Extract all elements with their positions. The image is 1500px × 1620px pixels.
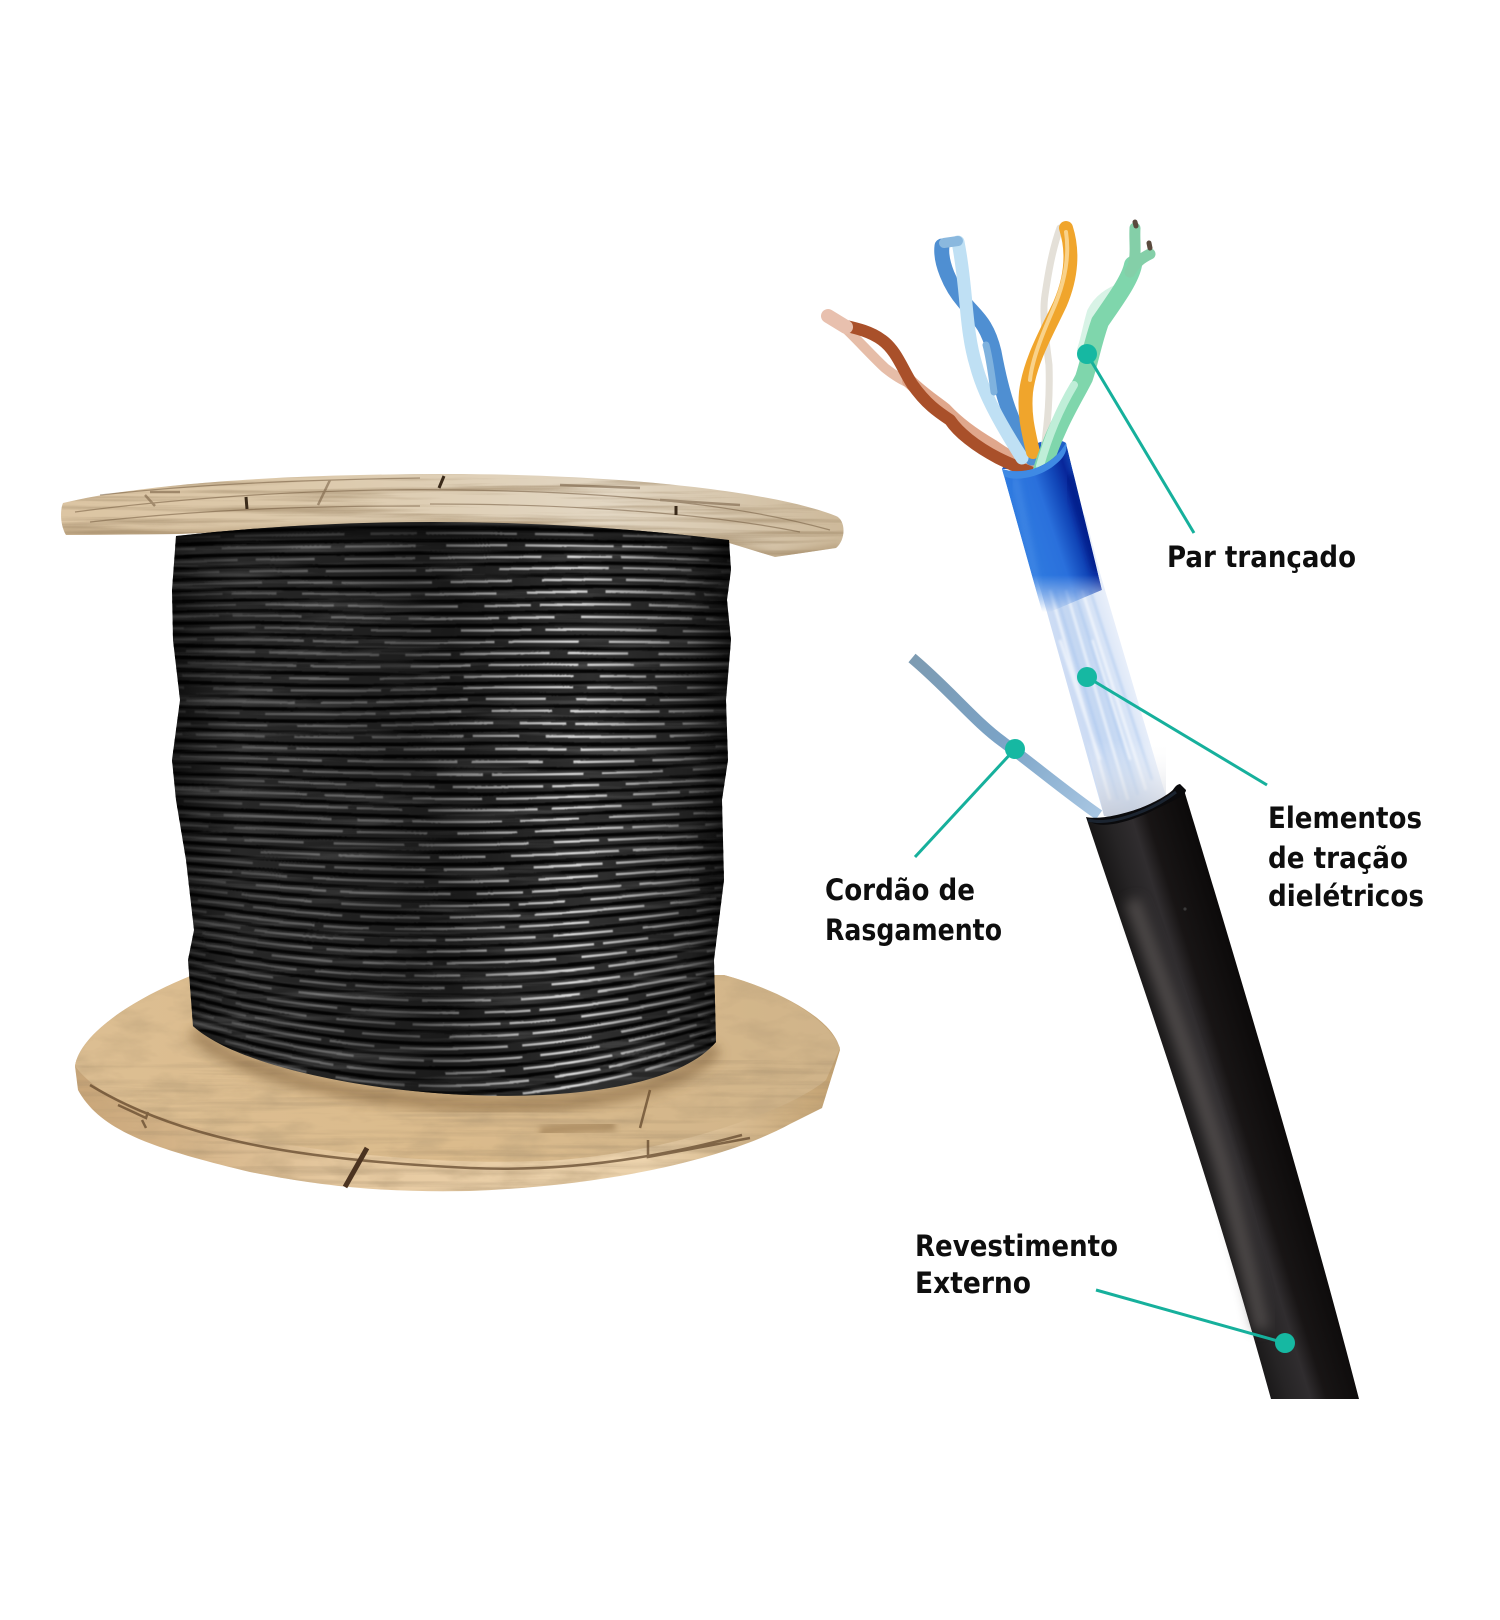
twisted pair: green <box>1040 222 1150 470</box>
wood grain on top flange <box>75 478 830 532</box>
label: Par trançado <box>1167 540 1356 574</box>
label: Externo <box>915 1266 1031 1300</box>
label: Elementos <box>1268 801 1422 835</box>
marker dot <box>1077 667 1097 687</box>
label: Cordão de <box>825 873 975 907</box>
label: Revestimento <box>915 1229 1118 1263</box>
leader line <box>1087 354 1194 533</box>
twisted pair: blue <box>942 241 1032 458</box>
blue inner sheath <box>1002 443 1102 615</box>
cable shadow on flange <box>193 1030 716 1105</box>
rip cord <box>912 658 1099 815</box>
bottom wooden flange <box>70 970 845 1195</box>
black outer jacket <box>1086 784 1359 1399</box>
leader line <box>1087 677 1267 785</box>
leader line <box>1096 1290 1285 1343</box>
callout: Par trançado <box>1077 344 1356 574</box>
callout: Cordão de Rasgamento <box>825 739 1025 947</box>
marker dot <box>1275 1333 1295 1353</box>
twisted pair: orange <box>1025 228 1070 452</box>
top wooden flange <box>60 470 850 560</box>
dielectric strength elements <box>1025 515 1166 816</box>
marker dot <box>1005 739 1025 759</box>
leader line <box>915 749 1015 857</box>
blue sheath back rim <box>1002 440 1066 470</box>
label: dielétricos <box>1268 879 1424 913</box>
wound black cable <box>172 522 731 1096</box>
marker dot <box>1077 344 1097 364</box>
twisted pair: brown <box>828 316 1030 472</box>
callout: Elementos de tração dielétricos <box>1077 667 1432 913</box>
sheath opening rim <box>1002 443 1067 479</box>
network cable cutaway <box>828 222 1359 1399</box>
cable spool photo <box>60 470 850 1195</box>
callout: Revestimento Externo <box>915 1229 1295 1353</box>
label: de tração <box>1268 841 1408 875</box>
label: Rasgamento <box>825 913 1002 947</box>
